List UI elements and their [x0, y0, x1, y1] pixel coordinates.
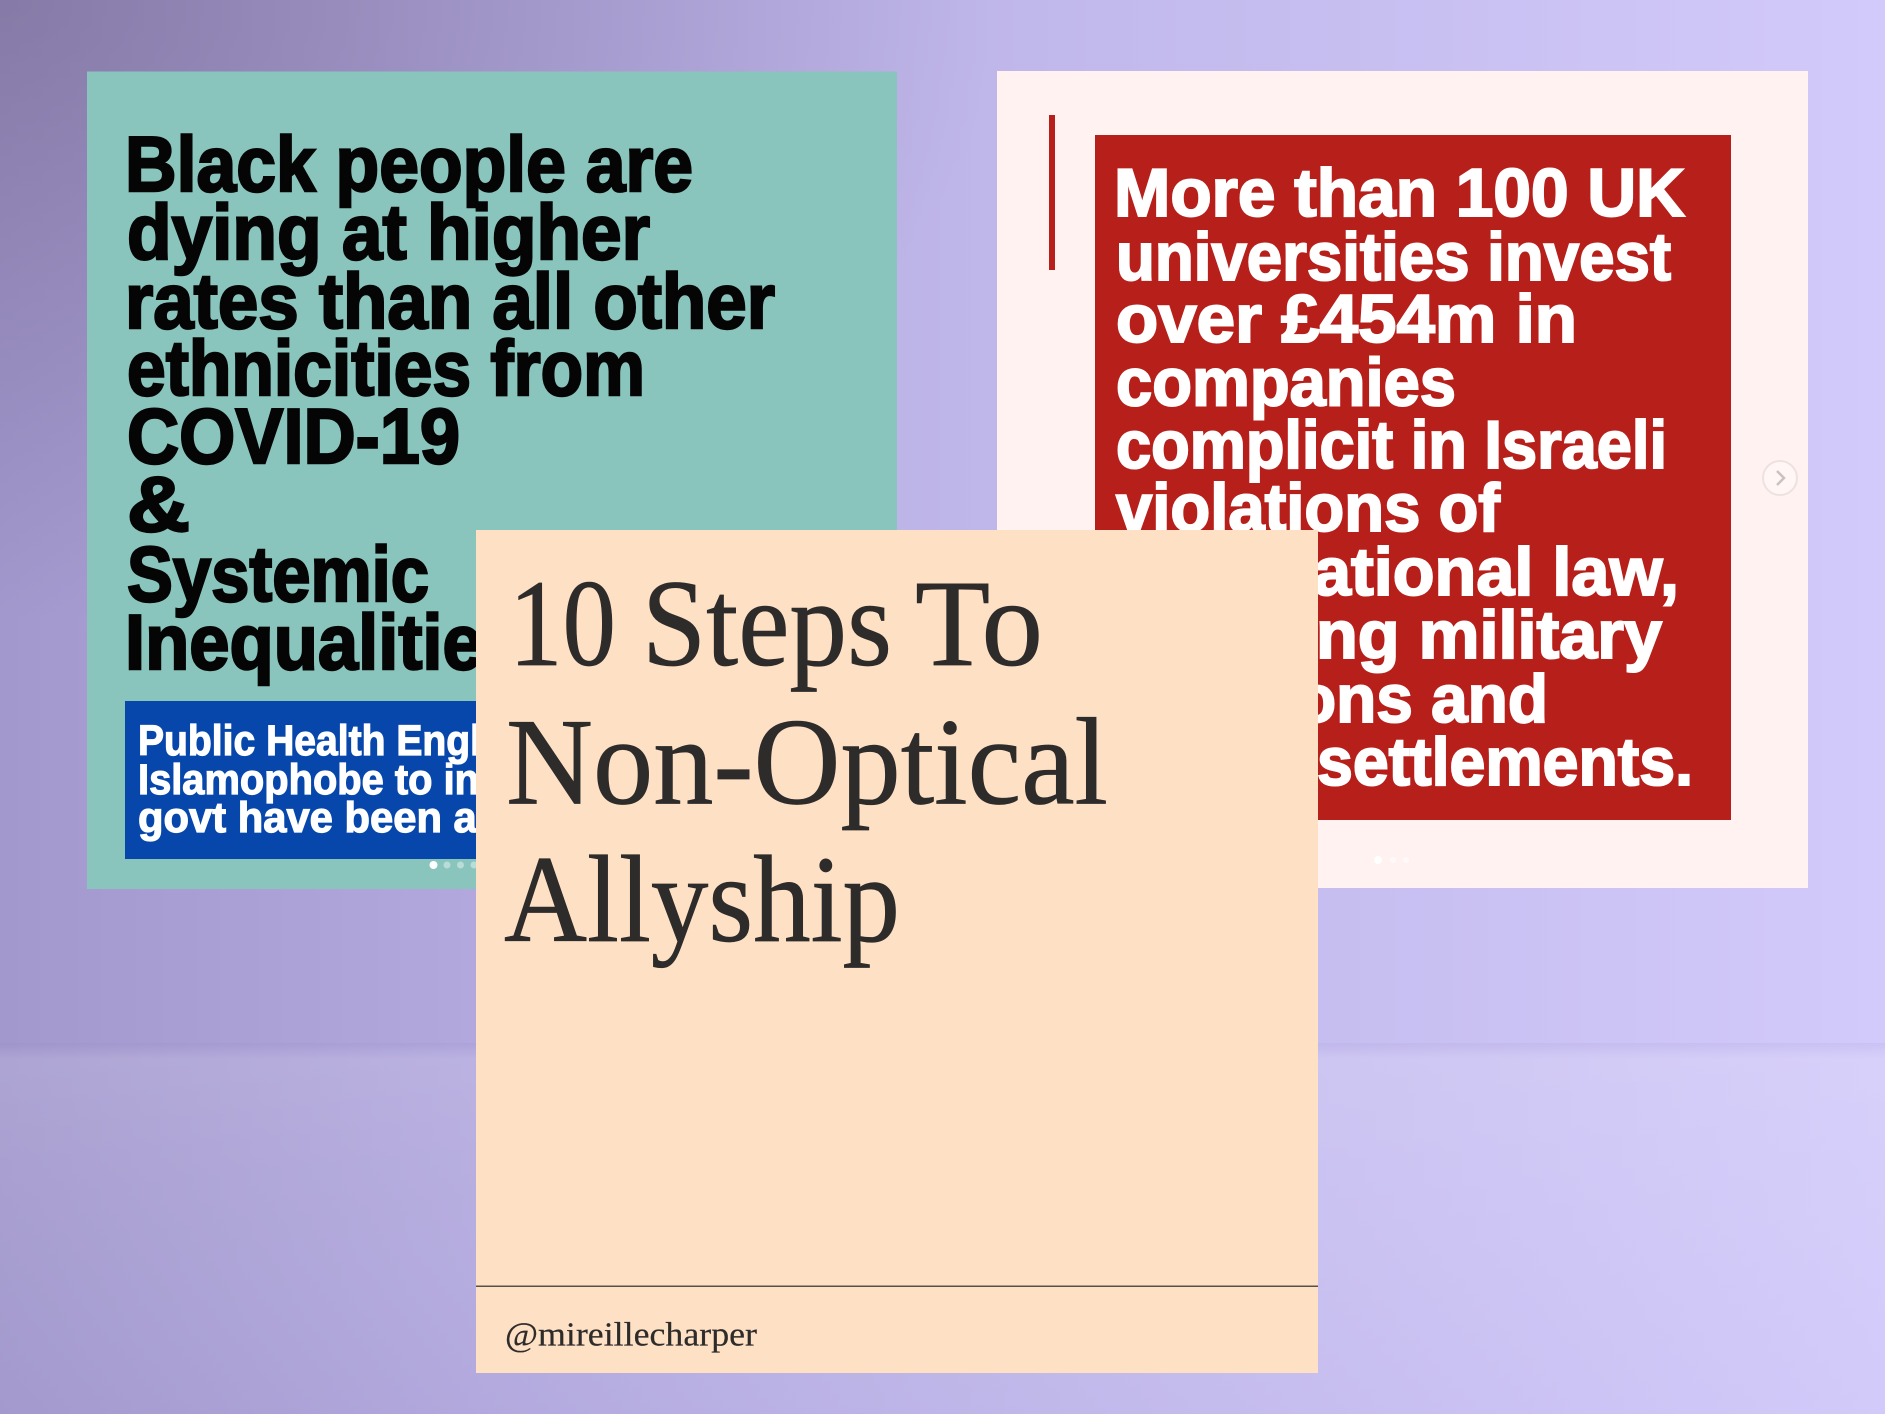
carousel dots: white post: [1374, 856, 1409, 864]
heading: Black people are dying: Systemic: [127, 530, 429, 618]
callout: red statement box: intern: [1116, 534, 1306, 610]
callout: red statement box: violations of: [1116, 470, 1500, 546]
title: 10 Steps To Non-Optical Allyship: Allyship: [504, 831, 900, 968]
panel: white universities post: [997, 71, 1808, 888]
title: 10 Steps To Non-Optical Allyship: [504, 555, 1108, 968]
heading: Black people are dying: Black people are: [125, 120, 693, 208]
heading: Black people are dying: rates than all other: [125, 257, 775, 345]
callout: red statement box: complicit in Israeli: [1116, 407, 1667, 483]
heading: Black people are dying: [125, 120, 775, 686]
callout: red statement box: operati: [1116, 661, 1286, 737]
title: 10 Steps To Non-Optical Allyship: 10: [509, 555, 616, 692]
heading: Black people are dying: ethnicities from: [127, 324, 645, 412]
handle: @mireillecharper: @mireillecharper: [505, 1316, 758, 1354]
callout: blue Public Health England box: Islamophobe to in: [138, 756, 479, 804]
heading: Black people are dying: COVID-19: [127, 392, 460, 480]
accent bar: [1049, 115, 1055, 270]
callout: red statement box: [1095, 135, 1731, 820]
callout: red statement box: companies: [1116, 344, 1456, 420]
icon: next arrow: [1763, 461, 1797, 495]
footer rule: [476, 1286, 1318, 1287]
callout: red statement box: settlements.: [1317, 724, 1693, 800]
panel: teal COVID-19 post: [87, 72, 897, 889]
title: 10 Steps To Non-Optical Allyship: Non-Optical: [506, 694, 1108, 830]
title: 10 Steps To Non-Optical Allyship: Steps: [642, 555, 892, 692]
carousel dots: teal post: [430, 861, 478, 869]
callout: blue Public Health England box: Public Health Engl: [138, 717, 481, 765]
callout: red statement box: illegal: [1116, 724, 1306, 800]
callout: red statement box: ng military: [1316, 597, 1662, 673]
callout: blue Public Health England box: [125, 701, 505, 859]
heading: Black people are dying: Inequalities: [125, 598, 523, 686]
callout: red statement box: ons and: [1296, 661, 1548, 737]
heading: Black people are dying: &: [127, 460, 190, 548]
callout: red statement box: ational law,: [1313, 534, 1679, 610]
callout: red statement box: over £454m in: [1116, 281, 1577, 357]
callout: red statement box: More than 100 UK: [1114, 155, 1685, 231]
callout: red statement box: includi: [1116, 597, 1306, 673]
heading: Black people are dying: dying at higher: [127, 188, 650, 276]
title: 10 Steps To Non-Optical Allyship: To: [915, 555, 1043, 692]
callout: red statement box: universities invest: [1116, 219, 1671, 295]
callout: blue Public Health England box: govt have been ac: [138, 794, 500, 842]
panel: cream title card: [476, 530, 1318, 1373]
